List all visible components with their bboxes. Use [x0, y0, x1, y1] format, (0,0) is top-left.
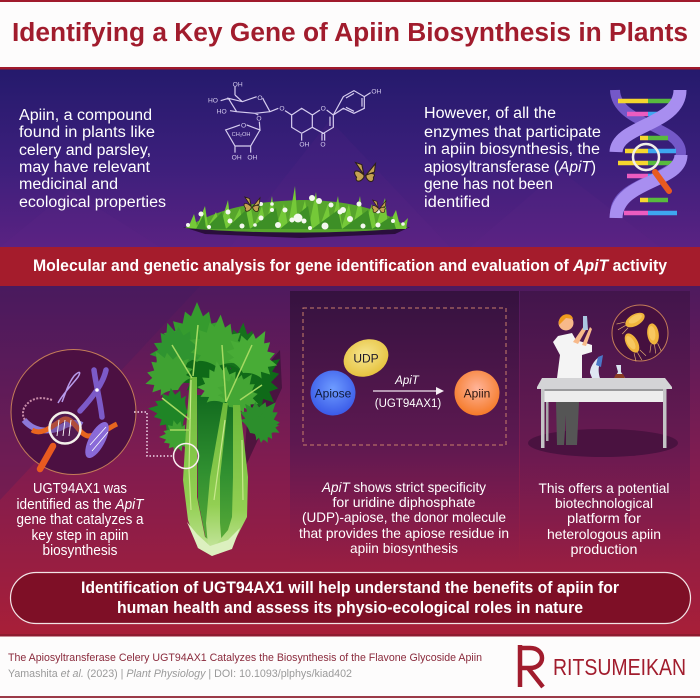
reaction diagram — [303, 308, 506, 445]
UDP node — [338, 333, 394, 383]
text block: UGT94AX1 identified: UGT94AX1 was — [33, 481, 127, 497]
celery stalks — [183, 377, 222, 556]
table — [537, 378, 672, 448]
text block: UDP-apiose specificity: (UDP)-apiose, the donor molecule — [302, 509, 506, 525]
chemical structure: apiin: OH — [299, 141, 309, 148]
text block: missing gene — [424, 105, 601, 211]
text block: apiin intro: medicinal and — [19, 176, 118, 193]
scientist — [553, 314, 592, 445]
text block: apiin intro: may have relevant — [19, 159, 151, 176]
text block: apiin intro: ecological properties — [19, 194, 166, 211]
text block: biotechnological platform: biotechnological — [555, 495, 653, 511]
chemical structure: apiin: CH₂OH — [232, 132, 251, 138]
chemical structure: apiin: O — [279, 106, 285, 113]
text block: apiin intro: celery and parsley, — [19, 142, 151, 159]
text block: biotechnological platform: platform for — [567, 510, 641, 526]
icon: DNA helix with magnifier — [615, 90, 681, 218]
text block: apiin intro — [19, 107, 166, 211]
chemical structure: apiin: O — [241, 122, 246, 129]
callout: conclusion: Identification of UGT94AX1 will help understand the benefits of apiin for — [81, 579, 620, 597]
title: Identifying a Key Gene of Apiin Biosynthesis in Plants — [12, 19, 688, 47]
butterflies — [355, 162, 376, 182]
text block: UDP-apiose specificity: for uridine diphosphate — [332, 494, 476, 510]
chemical structure: apiin: OH — [232, 154, 242, 161]
callout: conclusion — [10, 572, 690, 624]
text block: UDP-apiose specificity: ApiT shows strict specificity — [321, 479, 486, 495]
footer: citation: Yamashita et al. (2023) | Plant Physiology | DOI: 10.1093/plphys/kiad402 — [8, 668, 352, 680]
text block: missing gene: identified — [424, 194, 490, 211]
chemical structure: apiin: HO — [217, 108, 227, 115]
bacteria circle — [612, 305, 668, 363]
panel: laboratory background — [520, 291, 690, 566]
text block: missing gene: However, of all the — [424, 105, 556, 122]
chemical structure: apiin: O — [321, 106, 326, 113]
text block: UGT94AX1 identified: gene that catalyzes a — [16, 512, 144, 528]
text block: missing gene: apiosyltransferase (ApiT) — [424, 159, 596, 176]
text block: UDP-apiose specificity: apiin biosynthesis — [350, 540, 458, 556]
flask — [612, 365, 628, 382]
celery leaves — [134, 302, 299, 453]
arrow: ApiT reaction — [373, 375, 444, 410]
text block: missing gene: gene has not been — [424, 176, 553, 193]
white flowers — [186, 195, 405, 230]
text block: UGT94AX1 identified — [16, 481, 145, 559]
chemical structure: apiin: OH — [247, 154, 258, 161]
panel: lower background — [0, 286, 700, 636]
text block: missing gene: in apiin biosynthesis, the — [424, 141, 600, 158]
panel: enzyme reaction background — [290, 291, 519, 566]
celery back stalks — [197, 395, 238, 545]
arrow: ApiT reaction: (UGT94AX1) — [375, 398, 441, 410]
chemical structure: apiin: O — [257, 95, 263, 102]
meadow base — [183, 227, 410, 238]
arrow: ApiT reaction: ApiT — [394, 375, 420, 387]
chemical structure: apiin: O — [256, 116, 262, 123]
banner: analysis heading: Molecular and genetic analysis for gene identification and evaluation of ApiT activity — [33, 256, 668, 275]
text block: biotechnological platform: This offers a potential — [538, 480, 670, 496]
Apiin node: Apiin — [464, 386, 490, 400]
chemical structure: apiin — [208, 82, 381, 161]
dotted connector — [134, 412, 174, 456]
icon: magnified chromosome and DNA — [11, 350, 136, 474]
text block: UDP-apiose specificity — [299, 479, 509, 556]
text block: apiin intro: found in plants like — [19, 124, 155, 141]
illustration: scientist in laboratory — [528, 305, 678, 457]
text block: UDP-apiose specificity: that provides the apiose residue in — [299, 525, 509, 541]
text block: UGT94AX1 identified: biosynthesis — [42, 543, 118, 559]
text block: biotechnological platform — [538, 480, 670, 557]
logo: Ritsumeikan — [518, 645, 686, 687]
microscope — [586, 355, 603, 381]
text block: missing gene: enzymes that participate — [424, 124, 601, 141]
text block: biotechnological platform: heterologous apiin — [547, 526, 661, 542]
text block: UGT94AX1 identified: key step in apiin — [32, 528, 128, 544]
Apiose node — [310, 370, 356, 416]
text block: biotechnological platform: production — [570, 541, 638, 557]
chemical structure: apiin: HO — [208, 98, 218, 105]
Apiose node: Apiose — [315, 386, 352, 400]
text block: apiin intro: Apiin, a compound — [19, 107, 152, 124]
chemical structure: apiin: O — [320, 141, 326, 148]
illustration: celery — [134, 302, 299, 556]
chemical structure: apiin: OH — [371, 88, 381, 95]
banner: analysis heading — [0, 247, 700, 286]
chemical structure: apiin: OH — [233, 82, 243, 89]
footer: citation — [0, 634, 700, 698]
callout: conclusion: human health and assess its physio-ecological roles in nature — [117, 599, 583, 617]
UDP node: UDP — [353, 352, 379, 366]
panel: apiin background — [0, 67, 700, 247]
footer: citation: The Apiosyltransferase Celery UGT94AX1 Catalyzes the Biosynthesis of the Flavone Glycoside Apiin — [8, 652, 482, 664]
Apiin node — [454, 370, 500, 416]
text block: UGT94AX1 identified: identified as the ApiT — [16, 497, 145, 513]
illustration: grass meadow with butterflies — [183, 162, 410, 238]
